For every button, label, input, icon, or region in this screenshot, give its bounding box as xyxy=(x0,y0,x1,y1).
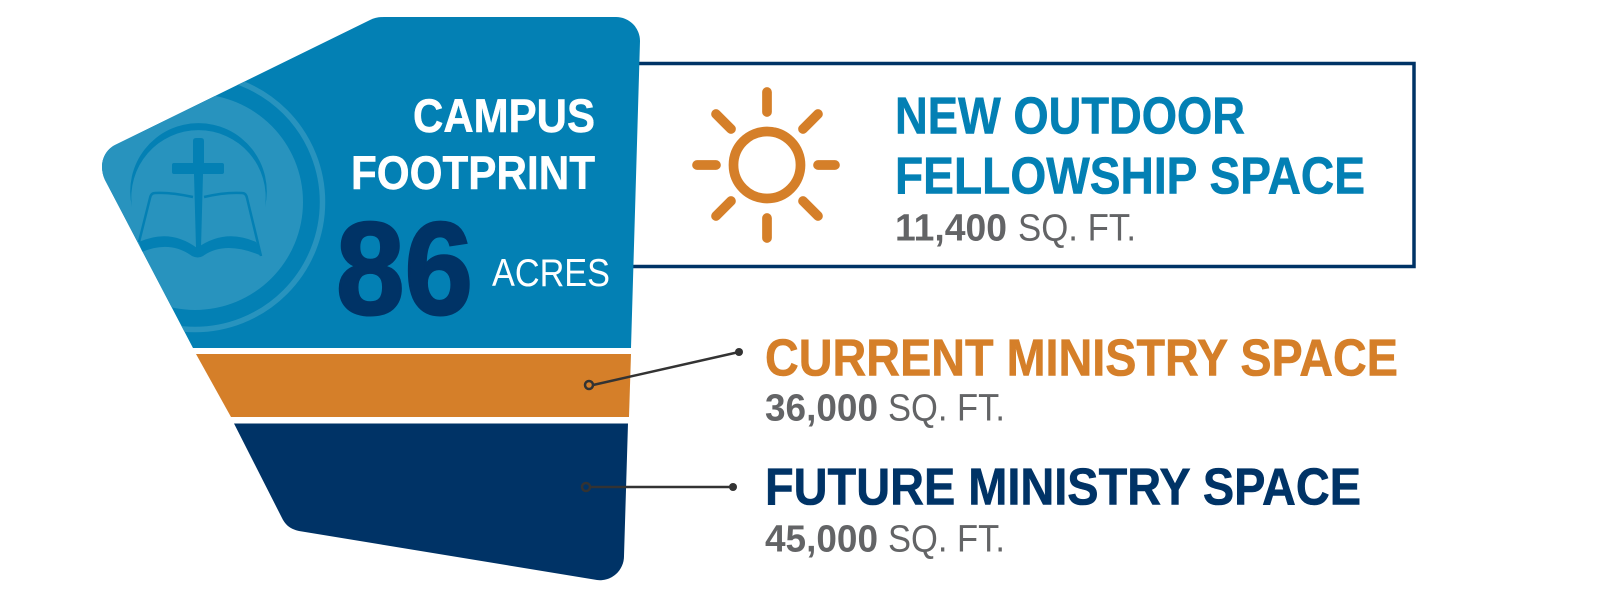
stat: 86 acres: ACRES xyxy=(492,252,610,295)
text: new outdoor fellowship space: NEW OUTDOOR xyxy=(895,88,1245,146)
stat: 86 acres xyxy=(336,195,610,342)
text: new outdoor fellowship space xyxy=(895,88,1365,250)
text: current ministry space: SQ. FT. xyxy=(888,388,1005,430)
segment: current ministry space xyxy=(196,354,631,417)
text: future ministry space: SQ. FT. xyxy=(888,518,1005,560)
text: new outdoor fellowship space: SQ. FT. xyxy=(1018,208,1136,250)
text: current ministry space: CURRENT MINISTRY SPACE xyxy=(765,330,1398,388)
icon: sun xyxy=(697,92,835,238)
heading: campus footprint: CAMPUS xyxy=(413,89,595,142)
text: new outdoor fellowship space: FELLOWSHIP SPACE xyxy=(895,148,1365,206)
text: new outdoor fellowship space: 11,400 xyxy=(895,208,1007,250)
outdoor fellowship box xyxy=(625,64,1414,266)
segment: future ministry space xyxy=(234,424,628,580)
text: current ministry space: 36,000 xyxy=(765,388,878,430)
stat: 86 acres: 86 xyxy=(336,195,473,342)
text: future ministry space xyxy=(765,458,1361,560)
infographic xyxy=(102,17,1416,580)
text: future ministry space: FUTURE MINISTRY SPACE xyxy=(765,458,1361,516)
heading: campus footprint: FOOTPRINT xyxy=(351,146,595,199)
panel: campus footprint blue block xyxy=(68,17,640,348)
text: current ministry space xyxy=(765,330,1398,430)
heading: campus footprint xyxy=(351,89,595,199)
callout line: future ministry space xyxy=(582,483,737,491)
emblem: cross and open book xyxy=(102,82,326,332)
text: future ministry space: 45,000 xyxy=(765,518,878,560)
callout line: current ministry space xyxy=(585,348,743,389)
